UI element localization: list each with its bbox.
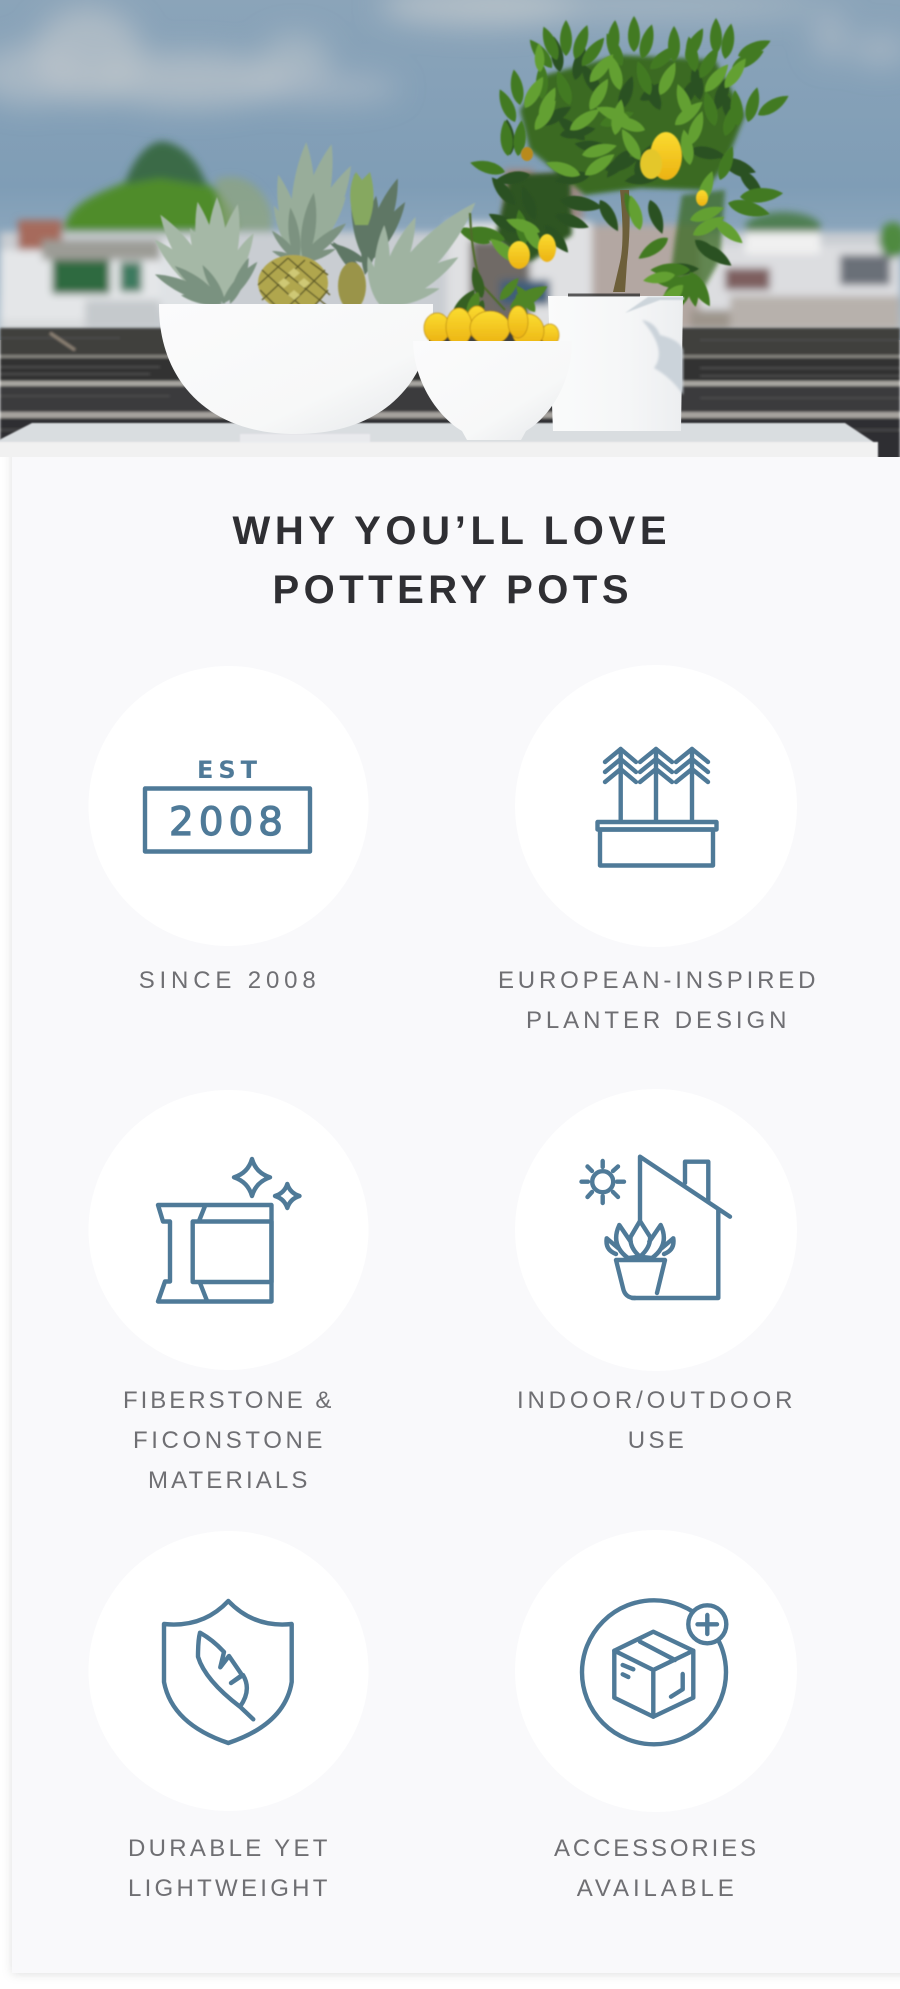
small white bowl planter (418, 341, 559, 440)
dark wooden fence (0, 328, 900, 468)
label (554, 1835, 756, 1902)
tall white cylinder planter (548, 295, 684, 431)
citrus tree trunk (613, 190, 630, 292)
pineapple crowns (154, 143, 475, 304)
feature: indoor outdoor use (515, 1089, 797, 1454)
label: USE (628, 1427, 684, 1454)
feature: durable yet lightweight (88, 1531, 368, 1902)
heading: POTTERY POTS (272, 568, 628, 612)
icon: box with plus in ring (582, 1600, 726, 1744)
label: FIBERSTONE & (123, 1387, 331, 1414)
label: EUROPEAN-INSPIRED (498, 967, 815, 994)
icon: est 2008 badge: EST (197, 756, 258, 784)
label: DURABLE YET (128, 1835, 328, 1862)
label: MATERIALS (148, 1467, 307, 1494)
heading: WHY YOU’LL LOVE (232, 509, 666, 553)
middle crown (274, 143, 351, 256)
front right crown (366, 203, 475, 304)
citrus tree foliage backing (495, 55, 745, 295)
citrus tree foliage (455, 16, 792, 318)
circle (88, 1531, 368, 1811)
icon: shield with feather (164, 1601, 292, 1743)
label (123, 1387, 331, 1494)
panel: white content card (12, 440, 900, 1973)
icon: house, sun and potted plant (582, 1157, 730, 1298)
label: AVAILABLE (577, 1875, 734, 1902)
icon: stone block with sparkles (158, 1159, 300, 1302)
circle (88, 666, 368, 946)
heading (232, 509, 666, 612)
circle (515, 1530, 797, 1812)
label: FICONSTONE (133, 1427, 322, 1454)
lemons on tree (508, 132, 708, 269)
mid leaves (455, 16, 792, 310)
pineapple fruit (338, 262, 366, 310)
icon: est 2008 badge (145, 756, 310, 852)
bright leaves (490, 43, 746, 296)
lemons in small bowl (422, 304, 560, 341)
sky with clouds (0, 0, 900, 340)
circle (88, 1090, 368, 1370)
dark leaves (486, 36, 768, 276)
label: SINCE 2008 (139, 967, 316, 994)
feature: fiberstone and ficonstone (88, 1090, 368, 1494)
label: LIGHTWEIGHT (128, 1875, 328, 1902)
white table top (0, 422, 879, 457)
photo: planters on rooftop table (0, 0, 900, 472)
circle (515, 665, 797, 947)
icon: trees in planter (598, 749, 716, 866)
back crown (330, 178, 406, 276)
blurred background buildings and trees (0, 142, 900, 332)
feature: european-inspired planter design (498, 665, 815, 1034)
label (517, 1387, 792, 1454)
feature: accessories available (515, 1530, 797, 1902)
circle (515, 1089, 797, 1371)
large white bowl planter (159, 304, 433, 434)
label: ACCESSORIES (554, 1835, 756, 1862)
left crown (156, 197, 254, 297)
feature: since 2008 (88, 666, 368, 994)
label (498, 967, 815, 1034)
icon: est 2008 badge: 2008 (169, 800, 283, 845)
label (128, 1835, 328, 1902)
label: INDOOR/OUTDOOR (517, 1387, 792, 1414)
label: PLANTER DESIGN (526, 1007, 786, 1034)
lemon branch (424, 213, 559, 348)
